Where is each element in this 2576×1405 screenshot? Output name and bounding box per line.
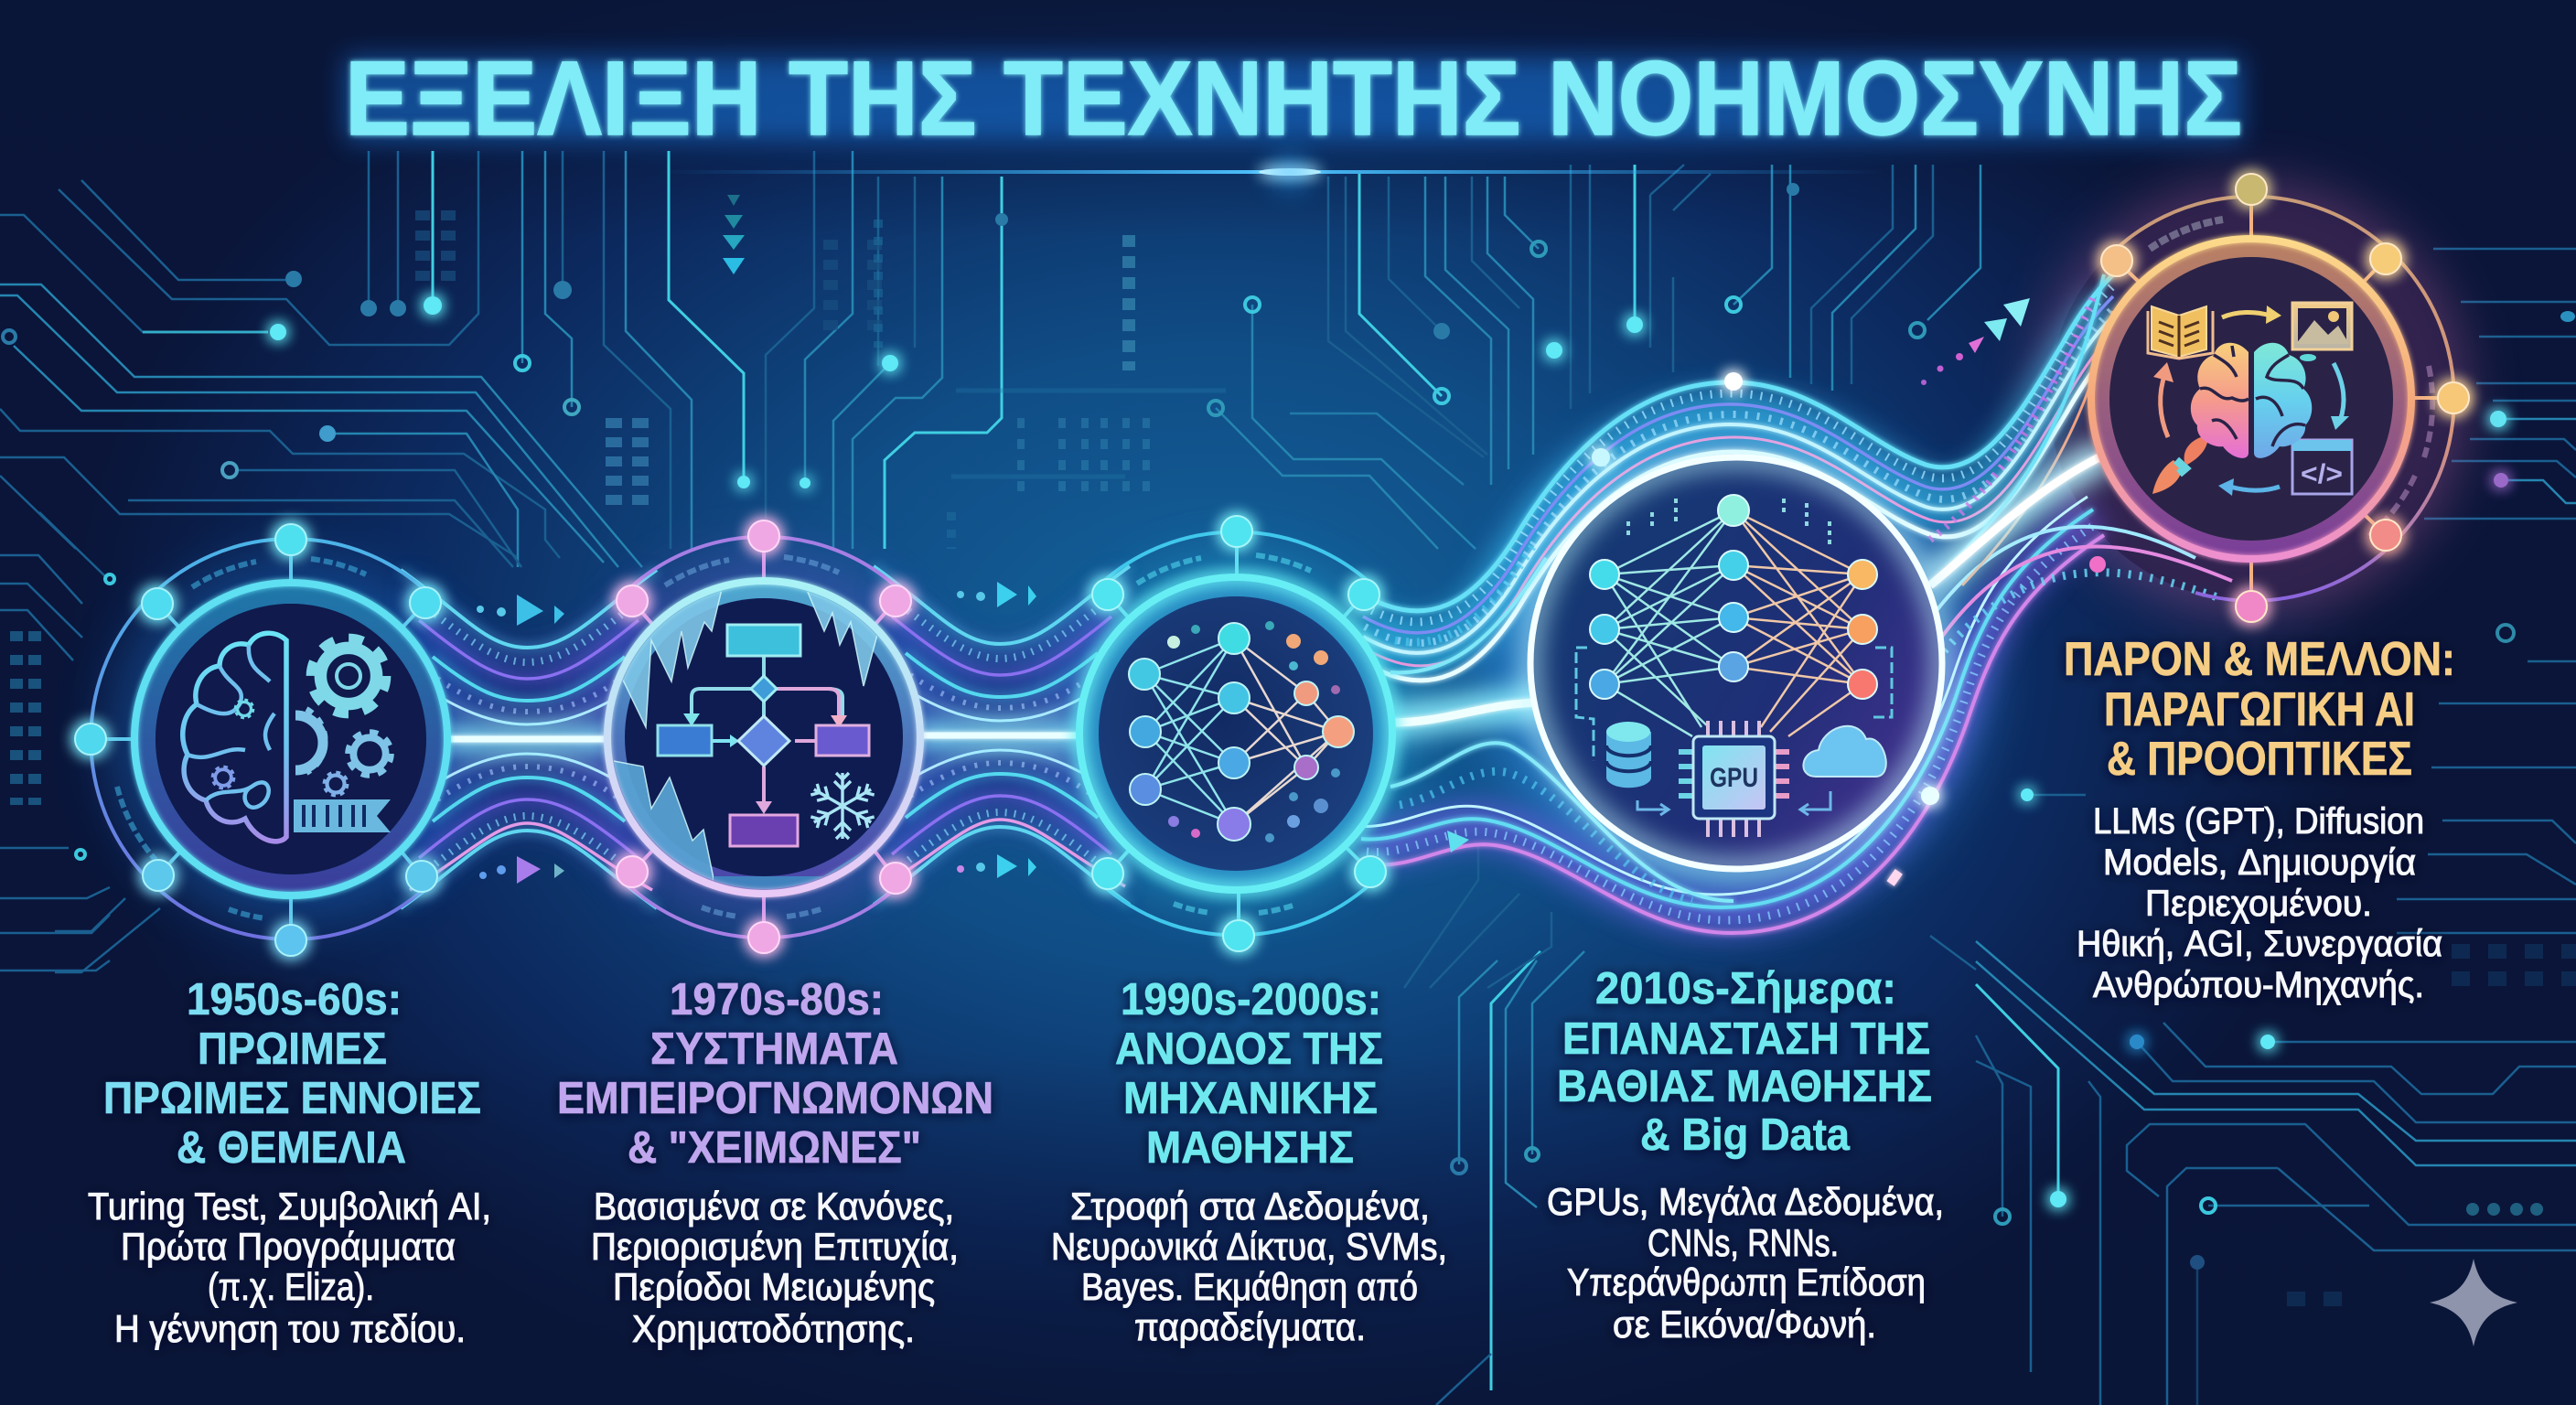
icon: GPU chip [1637,721,1830,837]
body: stage 1: (π.χ. Eliza). [208,1265,374,1308]
heading: stage 1: 1950s-60s: [187,975,402,1024]
body: stage 2: Βασισμένα σε Κανόνες, [594,1185,954,1228]
body: stage 4: CNNs, RNNs. [1648,1221,1839,1264]
panel: stage 1 circle [75,524,447,956]
circuit traces: upper left [0,151,1002,805]
heading: stage 4: ΒΑΘΙΑΣ ΜΑΘΗΣΗΣ [1557,1062,1932,1111]
heading: stage 3: ΜΑΘΗΣΗΣ [1146,1123,1354,1173]
heading: stage 2: & "ΧΕΙΜΩΝΕΣ" [628,1123,921,1173]
title underline flare [659,154,1884,190]
arrow: code to brush [2218,478,2280,496]
nodes: stage 5 [2101,174,2469,622]
arrow: brush to book [2153,362,2174,437]
icon: sparkle watermark [2430,1259,2517,1346]
arrows: toward stage 5 [1447,298,2030,853]
heading: stage 1: & ΘΕΜΕΛΙΑ [177,1123,406,1173]
heading: stage 3: ΑΝΟΔΟΣ ΤΗΣ [1115,1024,1383,1074]
body: stage 1: Πρώτα Προγράμματα [121,1225,456,1268]
body: stage 5 [2077,801,2442,1005]
arrow: book to image [2222,306,2281,324]
icon: image [2292,303,2352,349]
body: stage 3: Νευρωνικά Δίκτυα, SVMs, [1051,1225,1447,1268]
panel: stage 5 circle [2091,174,2469,622]
ambient glow behind timeline [108,184,2466,922]
body: stage 2: Χρηματοδότησης. [632,1307,915,1350]
heading: stage 4: & Big Data [1640,1110,1851,1160]
circuit traces: lower centre and left [0,845,1976,1405]
body: stage 5: Ανθρώπου-Μηχανής. [2093,965,2424,1005]
body: stage 3 [1051,1185,1447,1348]
heading: stage 3 [1115,975,1383,1173]
heading: stage 4 [1557,964,1932,1160]
body: stage 2: Περιορισμένη Επιτυχία, [591,1225,959,1268]
icon: cloud [1803,726,1886,777]
heading: stage 1 [103,975,481,1173]
circuit traces: upper centre [878,165,1980,549]
icon: deep neural network [1576,495,1892,761]
nodes: stage 2 [617,520,911,953]
heading: stage 1: ΠΡΩΙΜΕΣ [198,1024,387,1074]
icon: book [2148,306,2213,359]
body: stage 5: Models, Δημιουργία [2103,842,2416,883]
icon: database [1606,722,1651,788]
body: stage 4: σε Εικόνα/Φωνή. [1613,1303,1876,1346]
panel: stage 2 circle [604,520,924,953]
icon: generative brain [2191,343,2312,458]
body: stage 5: LLMs (GPT), Diffusion [2093,801,2424,842]
flow ribbon: stage 2 to stage 3 [874,566,1130,905]
body: stage 3: Bayes. Εκμάθηση από [1081,1265,1418,1308]
body: stage 1 [88,1185,491,1350]
circuit traces: right [1976,249,2576,1405]
heading: stage 1: ΠΡΩΙΜΕΣ ΕΝΝΟΙΕΣ [103,1074,481,1123]
arrows: between stage 2 and stage 3 [957,582,1036,878]
title glow bar and title [345,40,2242,157]
body: stage 1: Turing Test, Συμβολική AI, [88,1185,491,1228]
body: stage 2: Περίοδοι Μειωμένης [613,1265,935,1308]
body: stage 4 [1547,1180,1944,1346]
icon: downward triangles [723,195,745,274]
body: stage 4: GPUs, Μεγάλα Δεδομένα, [1547,1180,1944,1223]
arrow: image to code [2300,354,2349,430]
circuit nodes [3,183,2575,1270]
body: stage 4: Υπεράνθρωπη Επίδοση [1567,1260,1926,1303]
heading: stage 3: ΜΗΧΑΝΙΚΗΣ [1123,1074,1378,1123]
ice crystals [614,591,878,889]
panel: stage 3 circle [1079,516,1392,951]
heading: stage 5: ΠΑΡΟΝ & ΜΕΛΛΟΝ: [2064,633,2455,686]
body: stage 5: Ηθική, AGI, Συνεργασία [2077,924,2442,964]
icon: GPU chip: GPU [1710,763,1758,793]
heading: stage 2 [557,975,993,1173]
heading: stage 2: ΕΜΠΕΙΡΟΓΝΩΜΟΝΩΝ [557,1074,993,1123]
flow ribbon: stage 1 to stage 2 [401,570,657,908]
heading: stage 3: 1990s-2000s: [1121,975,1381,1024]
title: ΕΞΕΛΙΞΗ ΤΗΣ ΤΕΧΝΗΤΗΣ ΝΟΗΜΟΣΥΝΗΣ [345,40,2242,157]
icon: code window [2292,440,2352,494]
icon: brain and gears [183,633,392,842]
icon: code window: </> [2301,459,2343,489]
arrows: between stage 1 and stage 2 [477,595,564,884]
heading: stage 4: ΕΠΑΝΑΣΤΑΣΗ ΤΗΣ [1562,1014,1930,1064]
heading: stage 4: 2010s-Σήμερα: [1595,964,1896,1014]
flow ribbon: stage 3 to stage 5 around stage 4 [1356,274,2232,933]
text: stage 1 [88,975,491,1350]
text: stage 4 [1547,964,1944,1346]
panel: stage 4 circle [1530,372,1942,869]
body: stage 2 [591,1185,959,1350]
body: stage 1: Η γέννηση του πεδίου. [114,1307,466,1350]
text: stage 5 [2064,633,2455,1005]
body: stage 3: παραδείγματα. [1134,1305,1366,1348]
nodes: stage 3 [1092,516,1386,951]
heading: stage 2: ΣΥΣΤΗΜΑΤΑ [650,1024,898,1074]
text: stage 3 [1051,975,1447,1348]
body: stage 5: Περιεχομένου. [2145,884,2372,924]
text: stage 2 [557,975,993,1350]
nodes: stage 1 [75,524,441,956]
icon: neural network [1129,621,1354,842]
heading: stage 5 [2064,633,2455,786]
heading: stage 2: 1970s-80s: [670,975,884,1024]
heading: stage 5: & ΠΡΟΟΠΤΙΚΕΣ [2107,733,2412,786]
icon: flowchart and snowflake [658,625,875,846]
body: stage 3: Στροφή στα Δεδομένα, [1070,1185,1430,1228]
heading: stage 5: ΠΑΡΑΓΩΓΙΚΗ ΑΙ [2104,683,2415,736]
icon: brush [2152,435,2208,494]
